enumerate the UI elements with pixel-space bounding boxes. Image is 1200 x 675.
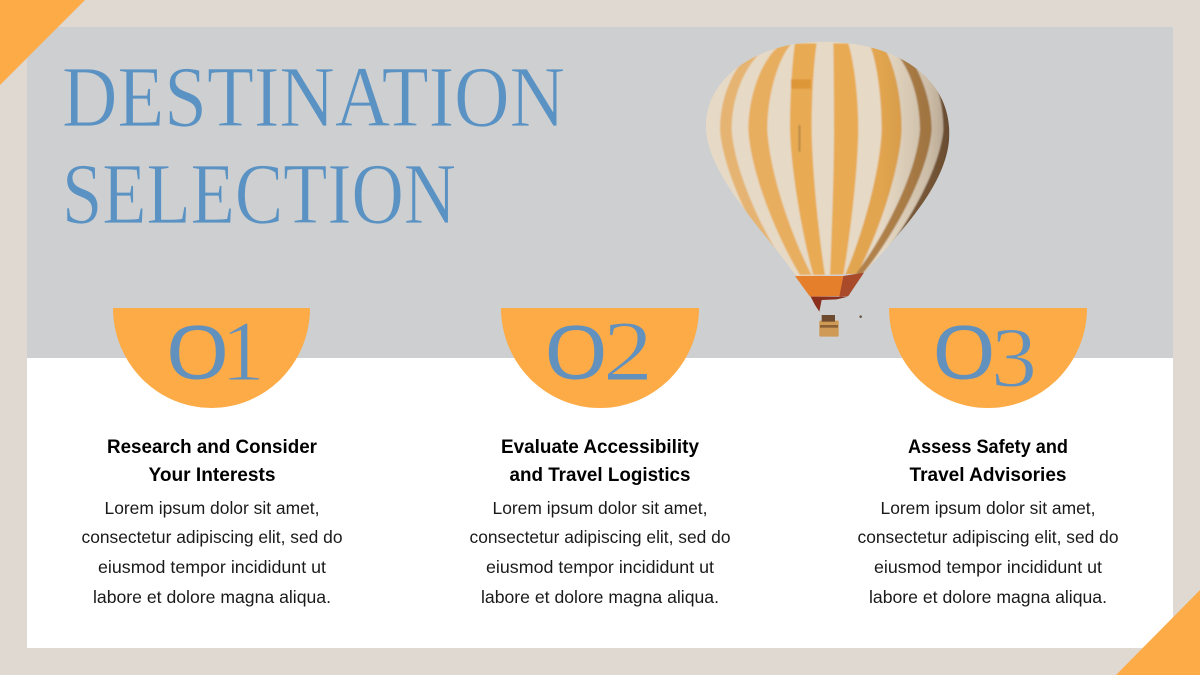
body text 02: Lorem ipsum dolor sit amet, bbox=[492, 498, 708, 518]
heading 01 bbox=[107, 436, 317, 486]
heading 03 bbox=[908, 436, 1068, 486]
heading 03: Assess Safety and bbox=[908, 436, 1068, 458]
body text 03: consectetur adipiscing elit, sed do bbox=[858, 527, 1118, 547]
step 01 bbox=[82, 303, 342, 607]
heading 01: Your Interests bbox=[148, 464, 276, 486]
number 03: 0 bbox=[931, 309, 997, 396]
body text 02: labore et dolore magna aliqua. bbox=[481, 587, 719, 607]
heading 02 bbox=[501, 436, 699, 486]
title: DESTINATION bbox=[62, 48, 565, 145]
body text 01 bbox=[82, 498, 342, 607]
balloon skirt shadow bbox=[839, 273, 864, 297]
number 02: 2 bbox=[603, 303, 653, 399]
title bbox=[62, 48, 565, 242]
semicircle badge 03 bbox=[889, 308, 1087, 408]
heading 02: and Travel Logistics bbox=[510, 464, 691, 486]
burner bbox=[811, 297, 848, 312]
body text 03: Lorem ipsum dolor sit amet, bbox=[880, 498, 1096, 518]
corner triangle: bottom right bbox=[1116, 590, 1200, 675]
number 03: 3 bbox=[991, 309, 1037, 405]
body text 01: eiusmod tempor incididunt ut bbox=[98, 557, 326, 577]
illustration: hot air balloon bbox=[700, 37, 960, 337]
number 01: 0 bbox=[165, 309, 230, 396]
heading 03: Travel Advisories bbox=[910, 464, 1067, 486]
number 01: 1 bbox=[222, 303, 264, 399]
number 01 bbox=[165, 303, 264, 399]
balloon skirt bbox=[795, 276, 843, 297]
corner triangle: top left bbox=[0, 0, 85, 85]
heading 02: Evaluate Accessibility bbox=[501, 436, 699, 458]
body text 02: eiusmod tempor incididunt ut bbox=[486, 557, 714, 577]
title: SELECTION bbox=[62, 145, 456, 242]
balloon envelope bbox=[706, 42, 950, 276]
step 03 bbox=[858, 308, 1118, 607]
step 02 bbox=[470, 303, 730, 607]
body text 01: Lorem ipsum dolor sit amet, bbox=[104, 498, 320, 518]
body text 02 bbox=[470, 498, 730, 607]
body text 01: labore et dolore magna aliqua. bbox=[93, 587, 331, 607]
body text 03: eiusmod tempor incididunt ut bbox=[874, 557, 1102, 577]
body text 01: consectetur adipiscing elit, sed do bbox=[82, 527, 342, 547]
semicircle badge 02 bbox=[501, 308, 699, 408]
body text 03: labore et dolore magna aliqua. bbox=[869, 587, 1107, 607]
white content panel bbox=[27, 358, 1173, 648]
body text 02: consectetur adipiscing elit, sed do bbox=[470, 527, 730, 547]
number 02 bbox=[543, 303, 653, 399]
basket bbox=[819, 315, 839, 337]
body text 03 bbox=[858, 498, 1118, 607]
semicircle badge 01 bbox=[113, 308, 310, 408]
heading 01: Research and Consider bbox=[107, 436, 317, 458]
number 03 bbox=[931, 309, 1037, 405]
sky photo panel bbox=[27, 27, 1173, 358]
distant speck bbox=[859, 315, 862, 318]
number 02: 0 bbox=[543, 309, 609, 396]
